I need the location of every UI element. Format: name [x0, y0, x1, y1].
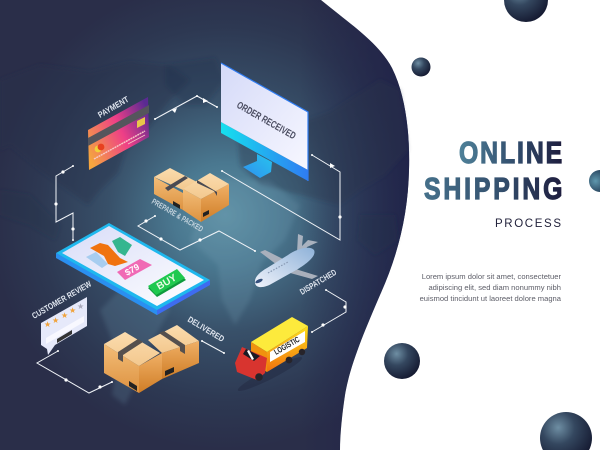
icon: logistic truck [235, 317, 308, 395]
title: ONLINE [459, 135, 562, 170]
icon: smartphone: $79 [123, 262, 141, 278]
description: Lorem ipsum dolor sit amet, consectetuer [422, 272, 561, 281]
description: adipiscing elit, sed diam nonummy nibh [428, 283, 561, 292]
world map [0, 58, 408, 405]
icon: desktop monitor: ORDER RECEIVED [235, 100, 297, 142]
label: dispatched: DISPATCHED [298, 267, 338, 297]
label: payment: PAYMENT [96, 94, 131, 120]
label: customer review: CUSTOMER REVIEW [30, 278, 94, 321]
icon: smartphone: BUY [155, 272, 179, 293]
sphere bottom [540, 412, 592, 450]
icon: credit card [88, 97, 149, 170]
icon: delivered boxes [104, 325, 199, 393]
title [424, 135, 562, 206]
title: SHIPPING [424, 171, 562, 206]
icon: review card: ★ [69, 306, 76, 315]
sphere top [504, 0, 548, 22]
icon: logistic truck: LOGISTIC [272, 335, 301, 357]
icon: packed boxes [154, 168, 229, 222]
icon: review card [41, 297, 87, 355]
sphere middle [384, 343, 420, 379]
label: delivered: DELIVERED [186, 314, 226, 344]
description: euismod tincidunt ut laoreet dolore magna [420, 294, 562, 303]
icon: review card: ★ [44, 320, 51, 329]
label: prepare and packed: PREPARE & PACKED [150, 197, 205, 234]
icon: review card: ★ [52, 316, 59, 325]
icon: desktop monitor [221, 63, 308, 181]
icon: airplane [255, 234, 318, 287]
dark background panel [0, 0, 409, 450]
decorative sphere [412, 58, 430, 76]
sphere right [589, 170, 600, 192]
icon: smartphone [56, 223, 210, 315]
description [420, 272, 562, 303]
dark shading along curved edge [300, 0, 409, 450]
icon: review card: ★ [77, 302, 84, 311]
connector lines [37, 96, 346, 393]
subtitle: PROCESS [495, 218, 561, 230]
icon: review card: ★ [61, 311, 68, 320]
